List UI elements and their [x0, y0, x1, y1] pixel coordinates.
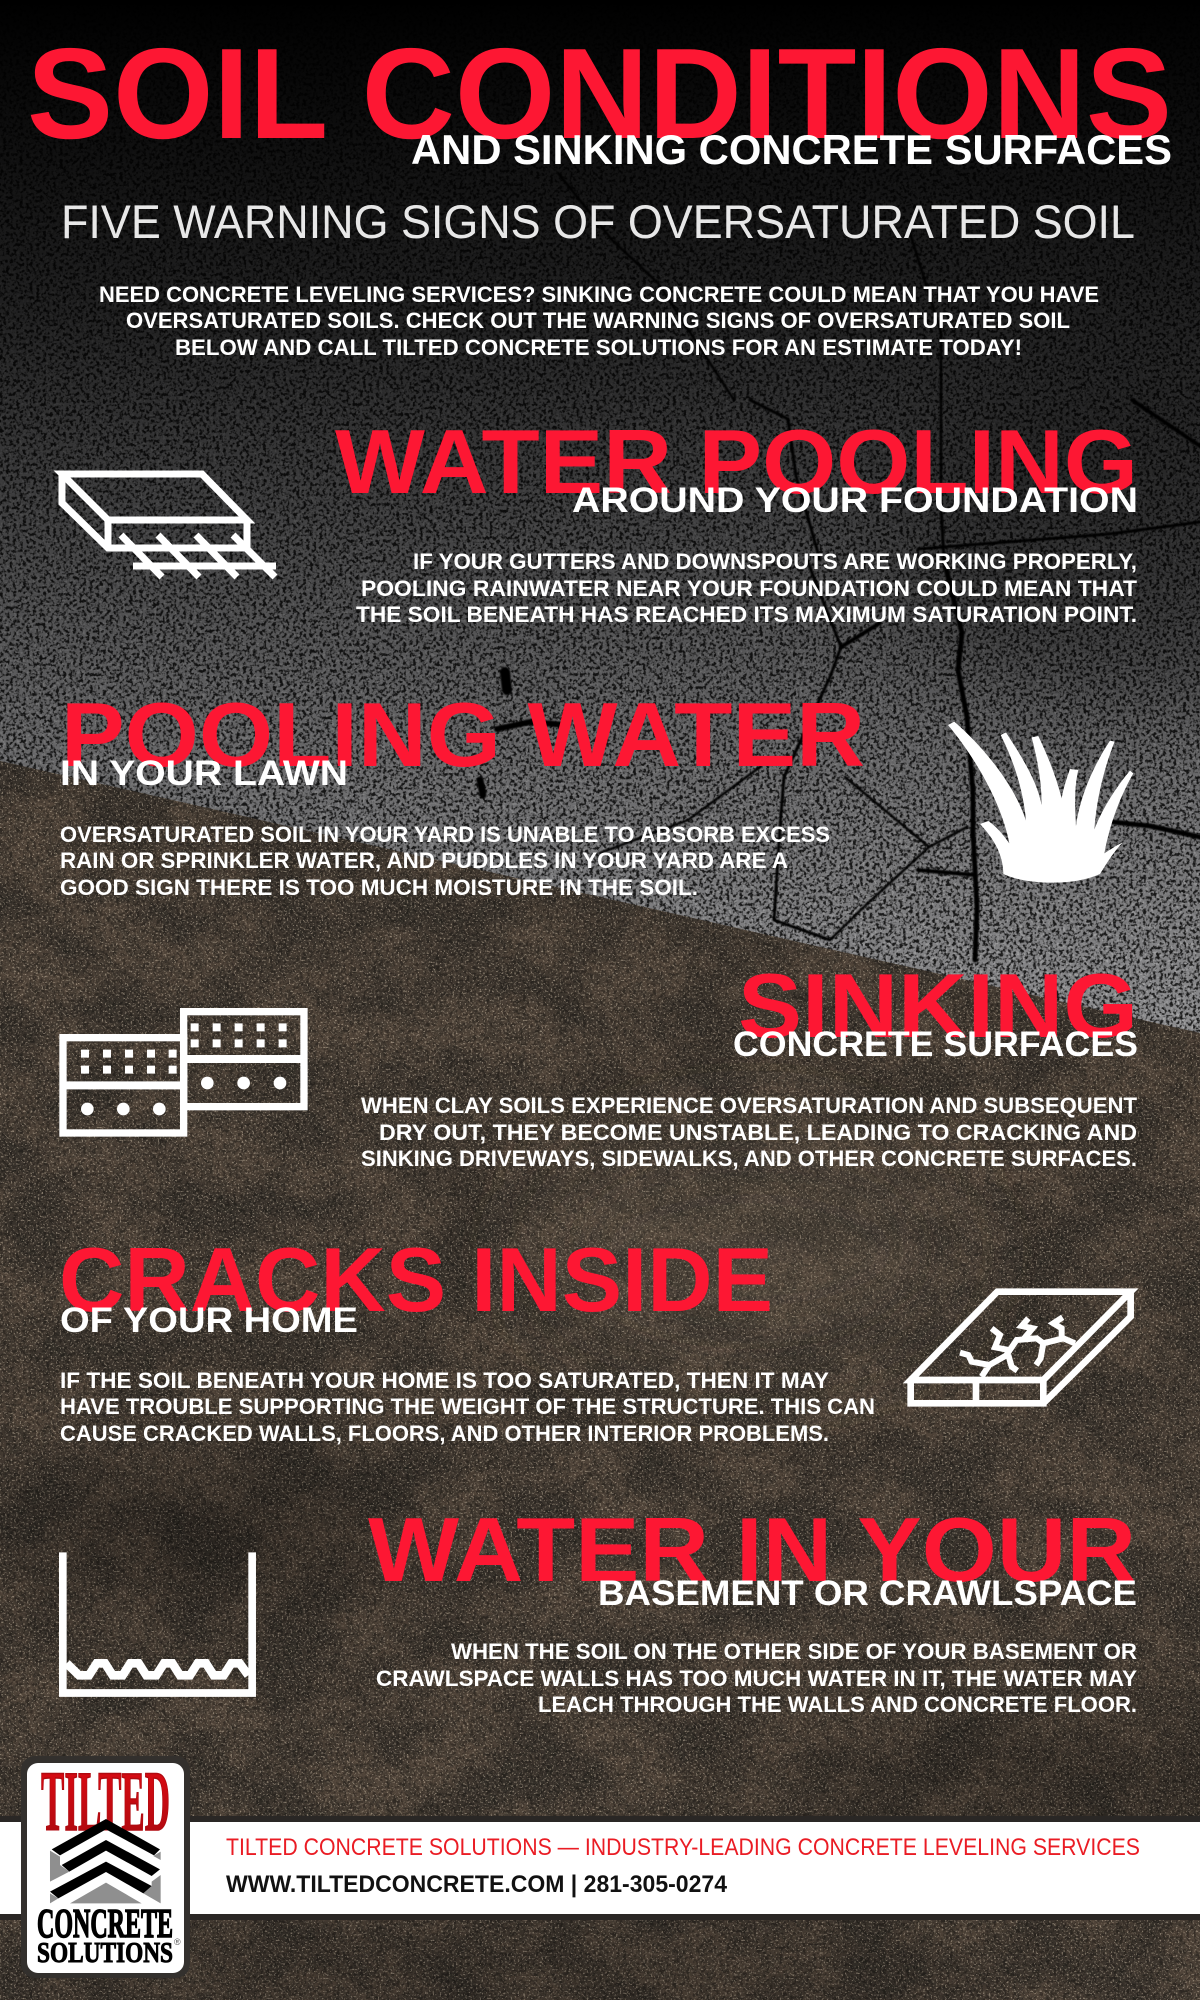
background: cracked asphalt fading to black: [0, 0, 1200, 1050]
body text: [376, 1639, 1137, 1717]
icon: flooded basement: [63, 1552, 252, 1693]
body text: SINKING DRIVEWAYS, SIDEWALKS, AND OTHER CONCRETE SURFACES.: [361, 1146, 1137, 1171]
logo: Tilted Concrete Solutions: [21, 1753, 190, 1978]
subtitle: AND SINKING CONCRETE SURFACES: [411, 126, 1172, 173]
body text: [60, 822, 830, 900]
heading: five warning signs: FIVE WARNING SIGNS OF OVERSATURATED SOIL: [61, 195, 1135, 248]
icon: cracked slab: [911, 1292, 1131, 1403]
intro text: NEED CONCRETE LEVELING SERVICES? SINKING CONCRETE COULD MEAN THAT YOU HAVE: [99, 282, 1099, 307]
subheading: OF YOUR HOME: [60, 1301, 358, 1340]
icon: offset concrete slabs: [63, 1012, 304, 1133]
heading: WATER POOLING: [335, 412, 1138, 513]
panel: sinking concrete surfaces: [63, 956, 1138, 1171]
panel: water pooling around your foundation: [62, 412, 1138, 627]
intro text: [99, 282, 1099, 360]
body text: [361, 1093, 1138, 1171]
logo wordmark: solutions: SOLUTIONS: [37, 1937, 173, 1969]
body text: IF THE SOIL BENEATH YOUR HOME IS TOO SATURATED, THEN IT MAY: [60, 1368, 829, 1393]
logo emblem: chevrons: [50, 1819, 161, 1903]
body text: HAVE TROUBLE SUPPORTING THE WEIGHT OF THE STRUCTURE. THIS CAN: [60, 1394, 875, 1419]
background: soil texture: [0, 700, 1200, 2000]
heading: WATER IN YOUR: [368, 1500, 1136, 1601]
body text: GOOD SIGN THERE IS TOO MUCH MOISTURE IN THE SOIL.: [60, 875, 698, 900]
subheading: IN YOUR LAWN: [60, 754, 348, 793]
heading: SINKING: [738, 956, 1138, 1057]
logo registered mark: ®: [174, 1937, 181, 1947]
body text: IF YOUR GUTTERS AND DOWNSPOUTS ARE WORKING PROPERLY,: [413, 549, 1137, 574]
intro text: OVERSATURATED SOILS. CHECK OUT THE WARNING SIGNS OF OVERSATURATED SOIL: [126, 308, 1070, 333]
intro text: BELOW AND CALL TILTED CONCRETE SOLUTIONS FOR AN ESTIMATE TODAY!: [175, 335, 1022, 360]
icon: foundation slab with rebar: [62, 474, 276, 577]
body text: LEACH THROUGH THE WALLS AND CONCRETE FLOOR.: [538, 1692, 1137, 1717]
body text: WHEN THE SOIL ON THE OTHER SIDE OF YOUR BASEMENT OR: [451, 1639, 1137, 1664]
body text: RAIN OR SPRINKLER WATER, AND PUDDLES IN YOUR YARD ARE A: [60, 848, 788, 873]
title: SOIL CONDITIONS: [27, 22, 1172, 166]
body text: DRY OUT, THEY BECOME UNSTABLE, LEADING TO CRACKING AND: [379, 1120, 1137, 1145]
body text: WHEN CLAY SOILS EXPERIENCE OVERSATURATION AND SUBSEQUENT: [361, 1093, 1138, 1118]
footer contact line: WWW.TILTEDCONCRETE.COM | 281-305-0274: [226, 1871, 728, 1898]
panel: pooling water in your lawn: [60, 685, 1133, 900]
body text: POOLING RAINWATER NEAR YOUR FOUNDATION COULD MEAN THAT: [361, 576, 1138, 601]
logo wordmark: concrete: CONCRETE: [37, 1900, 173, 1946]
subheading: BASEMENT OR CRAWLSPACE: [598, 1574, 1137, 1613]
body text: THE SOIL BENEATH HAS REACHED ITS MAXIMUM SATURATION POINT.: [356, 602, 1137, 627]
heading: CRACKS INSIDE: [59, 1230, 773, 1331]
subheading: AROUND YOUR FOUNDATION: [572, 481, 1138, 520]
body text: CRAWLSPACE WALLS HAS TOO MUCH WATER IN IT, THE WATER MAY: [376, 1666, 1137, 1691]
subheading: CONCRETE SURFACES: [733, 1025, 1138, 1064]
heading: POOLING WATER: [61, 685, 865, 786]
footer band: [0, 1816, 1200, 1920]
body text: [60, 1368, 875, 1446]
panel: water in your basement or crawlspace: [63, 1500, 1137, 1717]
panel: cracks inside of your home: [59, 1230, 1131, 1446]
body text: [356, 549, 1138, 627]
body text: CAUSE CRACKED WALLS, FLOORS, AND OTHER INTERIOR PROBLEMS.: [60, 1421, 829, 1446]
body text: OVERSATURATED SOIL IN YOUR YARD IS UNABLE TO ABSORB EXCESS: [60, 822, 830, 847]
icon: grass tuft: [948, 722, 1133, 883]
infographic page: TILTED: [41, 1753, 170, 1849]
